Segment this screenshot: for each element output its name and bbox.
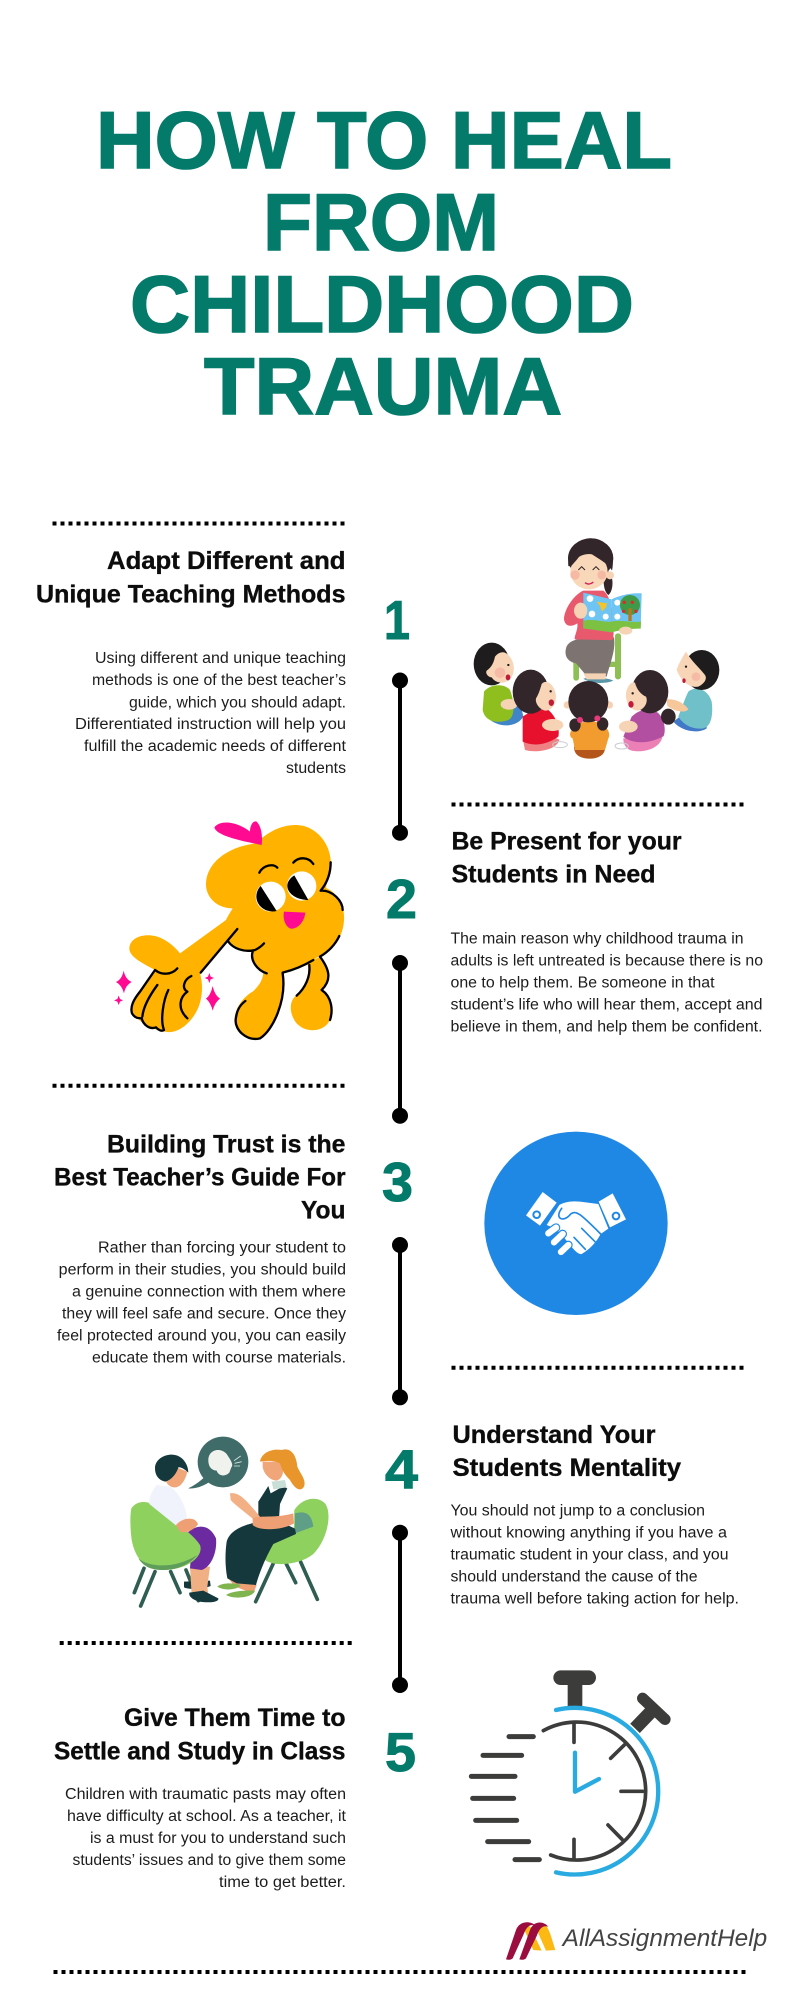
mascot bow	[214, 821, 262, 845]
title: TRAUMA	[204, 342, 562, 432]
chair legs	[134, 1562, 317, 1606]
text block: step 5: students’ issues and to give them some	[72, 1852, 346, 1869]
timeline connector 3	[392, 1237, 408, 1405]
heading: building trust	[54, 1131, 346, 1225]
teacher hair and face	[568, 538, 613, 578]
text block: step 4: without knowing anything if you have a	[449, 1524, 728, 1541]
illustration: two people talking in green chairs	[130, 1437, 329, 1606]
heading: give them time to settle	[54, 1704, 346, 1765]
cuffs	[526, 1192, 626, 1227]
heading: understand your students mentality: Students Mentality	[452, 1454, 681, 1482]
step number 1: 1	[384, 589, 410, 651]
right woman shirt and overalls	[275, 1487, 294, 1518]
step number 3: 3	[382, 1151, 413, 1213]
boy in green	[474, 643, 523, 725]
mascot eyes	[256, 882, 286, 912]
text block: step 2: believe in them, and help them be confident.	[450, 1019, 762, 1036]
text block: step 1: guide, which you should adapt.	[129, 694, 346, 711]
title: HOW TO HEAL	[96, 96, 672, 186]
back leg	[291, 957, 332, 1030]
title: CHILDHOOD	[130, 260, 634, 350]
title	[96, 96, 672, 432]
heading: building trust: Building Trust is the	[107, 1131, 346, 1159]
front leg	[234, 972, 284, 1039]
text block: step 3	[57, 1239, 346, 1366]
fingers	[548, 1228, 568, 1252]
right woman arms	[230, 1493, 260, 1523]
heading: give them time to settle: Settle and Study in Class	[54, 1737, 346, 1765]
teacher chair	[573, 633, 621, 681]
heading: understand your students mentality: Understand Your	[452, 1421, 656, 1449]
text block: step 3: educate them with course materials.	[92, 1349, 346, 1366]
left chair	[130, 1502, 201, 1570]
right woman lower legs and shoes	[228, 1578, 257, 1593]
teacher body	[564, 591, 614, 640]
right woman trousers	[225, 1520, 296, 1585]
text block: step 4: You should not jump to a conclusion	[450, 1502, 705, 1519]
logo: AllAssignmentHelp: AllAssignmentHelp	[561, 1925, 767, 1952]
text block: step 4: should understand the cause of the	[450, 1568, 698, 1585]
text block: step 1	[75, 650, 347, 777]
heading: be present for your students in need	[452, 828, 682, 888]
text block: step 4: trauma well before taking action for help.	[450, 1590, 739, 1607]
hands	[547, 1201, 608, 1254]
text block: step 1: students	[286, 760, 346, 777]
step number 5: 5	[385, 1721, 416, 1783]
left woman head	[165, 1467, 187, 1487]
text block: step 2: student’s life who will hear them, accept and	[450, 996, 762, 1014]
step number 4: 4	[385, 1438, 418, 1500]
timeline connector 4	[392, 1525, 408, 1693]
right woman head	[263, 1462, 283, 1481]
heading: give them time to settle: Give Them Time to	[124, 1704, 346, 1732]
left woman shirt	[149, 1485, 187, 1526]
title: FROM	[263, 178, 499, 268]
heading: building trust: You	[301, 1197, 346, 1225]
sparkles	[114, 971, 220, 1011]
mascot outline strokes	[131, 858, 343, 1039]
right chair	[264, 1499, 329, 1564]
book	[583, 593, 612, 632]
text block: step 5: is a must for you to understand such	[90, 1830, 346, 1847]
heading: adapt different and unique teaching methods: Unique Teaching Methods	[36, 580, 346, 608]
heading: be present for your students in need: Students in Need	[452, 860, 656, 888]
heading: adapt different and unique teaching methods: Adapt Different and	[107, 547, 346, 575]
step number 2: 2	[386, 868, 417, 930]
icon: handshake in blue circle	[484, 1132, 668, 1315]
text block: step 2: one to help them. Be someone in that	[450, 974, 715, 992]
heading: building trust: Best Teacher’s Guide For	[54, 1164, 346, 1192]
text block: step 2	[450, 930, 763, 1036]
timeline connector 2	[392, 955, 408, 1124]
teacher legs	[566, 637, 614, 677]
left woman arm	[176, 1519, 198, 1532]
text block: step 2: The main reason why childhood trauma in	[450, 930, 744, 947]
mascot mouth	[284, 912, 305, 929]
text block: step 1: Using different and unique teaching	[95, 650, 346, 667]
left woman lower legs and shoes	[184, 1581, 211, 1589]
text block: step 3: they will feel safe and secure. Once they	[62, 1305, 346, 1322]
logo mark	[506, 1922, 555, 1960]
girl in orange seen from behind	[564, 681, 613, 759]
girl in purple	[615, 670, 668, 751]
boy in teal	[661, 650, 719, 731]
speech bubble	[188, 1477, 210, 1488]
left woman purple trousers	[187, 1527, 216, 1570]
text block: step 4: traumatic student in your class, and you	[450, 1546, 728, 1563]
text block: step 3: a genuine connection with them where	[72, 1283, 346, 1300]
teacher ponytail	[604, 570, 612, 595]
text block: step 3: Rather than forcing your student to	[98, 1239, 346, 1256]
text block: step 1: methods is one of the best teacher’s	[92, 672, 346, 689]
text block: step 5	[65, 1786, 347, 1891]
text block: step 3: feel protected around you, you can easily	[57, 1327, 346, 1344]
text block: step 4	[449, 1502, 739, 1607]
text block: step 5: Children with traumatic pasts may often	[65, 1786, 346, 1803]
icon: stopwatch	[471, 1670, 665, 1874]
text block: step 5: time to get better.	[219, 1874, 346, 1891]
text block: step 1: fulfill the academic needs of different	[84, 738, 347, 755]
heading: understand your students mentality	[452, 1421, 681, 1482]
heading: adapt different and unique teaching methods	[36, 547, 346, 608]
text block: step 5: have difficulty at school. As a teacher, it	[67, 1808, 347, 1825]
text block: step 2: adults is left untreated is because there is no	[450, 952, 763, 970]
illustration: teacher reading to children	[474, 538, 719, 759]
text block: step 1: Differentiated instruction will help you	[75, 716, 346, 733]
timeline connector 1	[392, 672, 408, 841]
logo: AllAssignmentHelp	[506, 1922, 767, 1960]
text block: step 3: perform in their studies, you should build	[59, 1261, 346, 1278]
heading: be present for your students in need: Be Present for your	[452, 828, 682, 856]
girl in red	[513, 670, 567, 751]
illustration: yellow mascot reaching out	[114, 821, 344, 1039]
head body and arm	[129, 825, 344, 1032]
